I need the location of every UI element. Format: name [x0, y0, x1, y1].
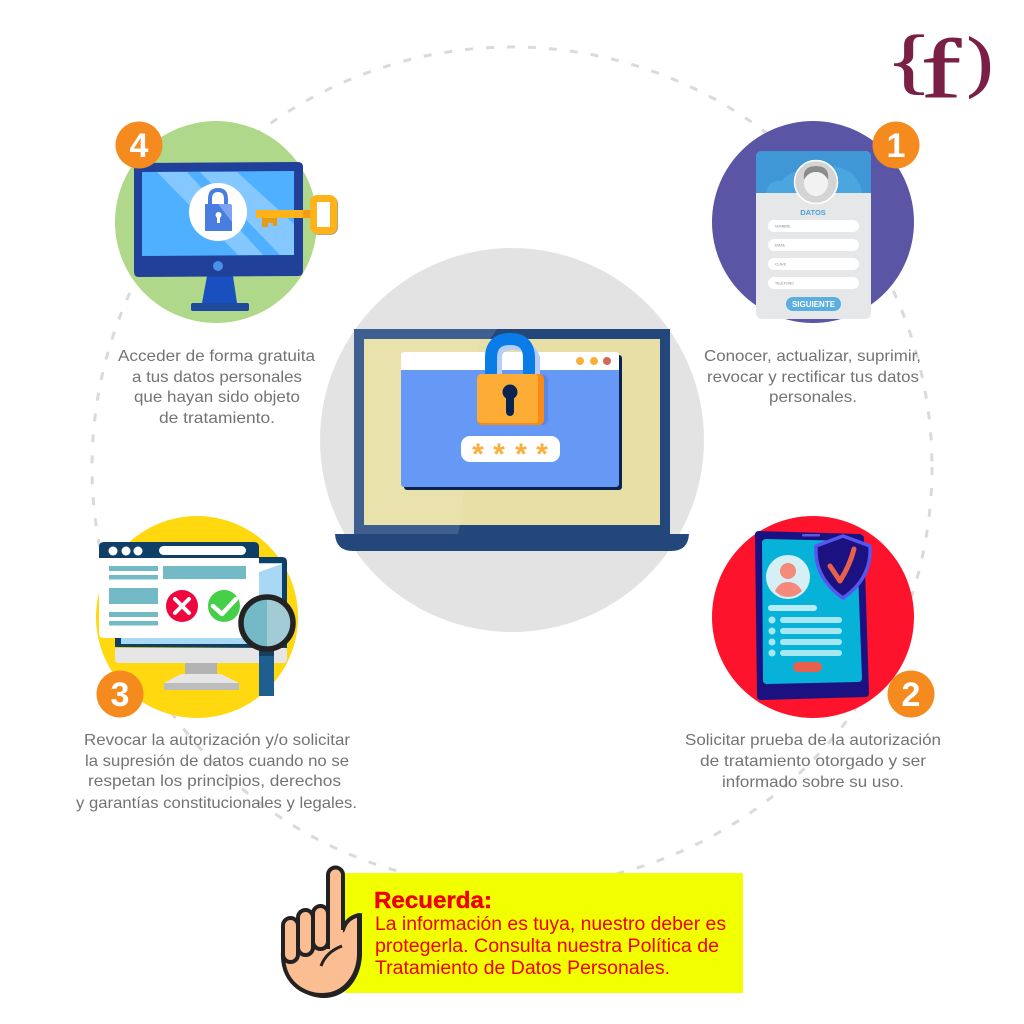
step 3 icon: review window and magnifier — [96, 516, 298, 718]
key — [256, 198, 334, 232]
badge 1 — [872, 122, 920, 168]
step 3 text — [76, 732, 357, 812]
padlock icon — [205, 190, 232, 231]
badge 2: 2 — [902, 676, 920, 714]
callout: reminder: La información es tuya, nuestro deber es — [375, 914, 726, 935]
padlock — [477, 339, 548, 425]
step 3 text: y garantías constitucionales y legales. — [76, 795, 357, 812]
callout: reminder: Recuerda: — [374, 887, 492, 913]
password field: * — [493, 438, 505, 471]
step 1 icon: data form: TELÉFONO — [775, 280, 794, 286]
step 2 icon: tablet with shield — [712, 516, 914, 718]
logo: { — [886, 21, 932, 101]
password field — [461, 436, 560, 471]
password field: * — [536, 438, 548, 471]
step 2 text: informado sobre su uso. — [722, 774, 904, 791]
step 1 text: revocar y rectificar tus datos — [707, 369, 919, 386]
step 2 text: de tratamiento otorgado y ser — [700, 753, 927, 770]
step 1 icon: data form: EMAIL — [775, 244, 786, 248]
step 1 icon: data form — [712, 121, 914, 323]
step 1 icon: data form: DATOS — [800, 208, 826, 217]
password field: * — [472, 438, 484, 471]
approve mark — [208, 590, 240, 622]
badge 3 — [96, 670, 144, 718]
central illustration: laptop with padlock — [320, 248, 704, 632]
shield — [816, 536, 870, 598]
step 4 icon: monitor and key — [115, 121, 334, 323]
step 1 icon: data form: SIGUIENTE — [792, 300, 836, 309]
step 2 text — [685, 732, 941, 791]
step 4 text — [118, 348, 315, 427]
password field: * — [515, 438, 527, 471]
icon: pointing hand — [283, 868, 362, 998]
step 1 text: personales. — [769, 389, 857, 406]
badge 2 — [888, 670, 934, 718]
step 2 text: Solicitar prueba de la autorización — [685, 732, 941, 749]
badge 4 — [116, 122, 162, 168]
callout: reminder: protegerla. Consulta nuestra Política de — [375, 936, 719, 957]
badge 3: 3 — [111, 676, 129, 714]
logo — [886, 21, 993, 116]
logo: ) — [967, 23, 993, 99]
badge 1: 1 — [887, 127, 905, 165]
step 1 text — [704, 348, 921, 406]
step 3 text: la supresión de datos cuando no se — [85, 753, 349, 770]
callout: reminder — [283, 868, 743, 998]
callout: reminder: Tratamiento de Datos Personales. — [375, 958, 670, 979]
step 1 icon: data form: CLAVE — [775, 262, 787, 266]
reject mark — [166, 590, 198, 622]
logo: f — [921, 23, 961, 116]
step 3 text: respetan los principios, derechos — [88, 773, 341, 790]
step 1 icon: data form: NOMBRE — [775, 224, 791, 228]
step 1 text: Conocer, actualizar, suprimir, — [704, 348, 921, 365]
step 4 text: que hayan sido objeto — [134, 389, 300, 406]
magnifier — [241, 597, 293, 696]
step 4 text: Acceder de forma gratuita — [118, 348, 315, 365]
step 3 text: Revocar la autorización y/o solicitar — [84, 732, 351, 749]
badge 4: 4 — [130, 127, 149, 165]
step 4 text: de tratamiento. — [159, 410, 275, 427]
step 4 text: a tus datos personales — [132, 369, 302, 386]
